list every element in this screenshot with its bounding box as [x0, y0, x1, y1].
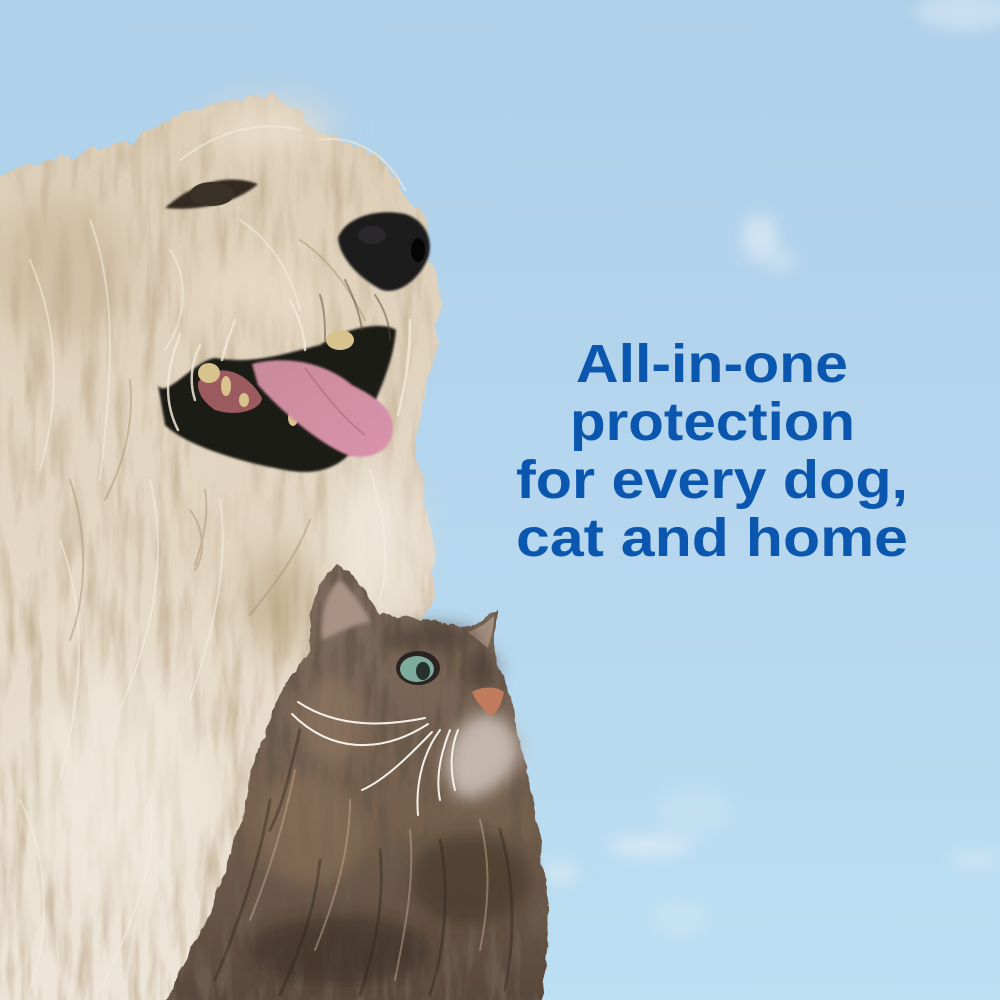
headline: protection [570, 392, 855, 452]
dog body and head silhouette [0, 96, 437, 1000]
headline: for every dog, [516, 450, 908, 510]
dog [0, 96, 437, 1000]
dog mouth [158, 326, 396, 472]
cat muzzle [446, 714, 520, 800]
headline: cat and home [516, 508, 908, 568]
lips and gums [198, 370, 262, 413]
cat tabby shading [250, 624, 530, 985]
tongue [252, 360, 393, 457]
fur strands [20, 126, 405, 990]
fur shading [0, 106, 415, 910]
teeth [198, 330, 354, 426]
cat body silhouette [155, 565, 548, 1000]
dog eye [165, 179, 258, 209]
cat eye [396, 651, 440, 685]
muzzle fur strands [168, 280, 410, 430]
headline: All-in-one [576, 334, 848, 394]
dog nose [338, 212, 430, 291]
cat [155, 565, 548, 1000]
cat nose [472, 688, 504, 716]
clouds [542, 0, 1000, 938]
cat fur strands [215, 730, 512, 995]
cat whiskers [292, 702, 458, 815]
headline [516, 334, 908, 568]
cat inner ear [322, 580, 370, 640]
